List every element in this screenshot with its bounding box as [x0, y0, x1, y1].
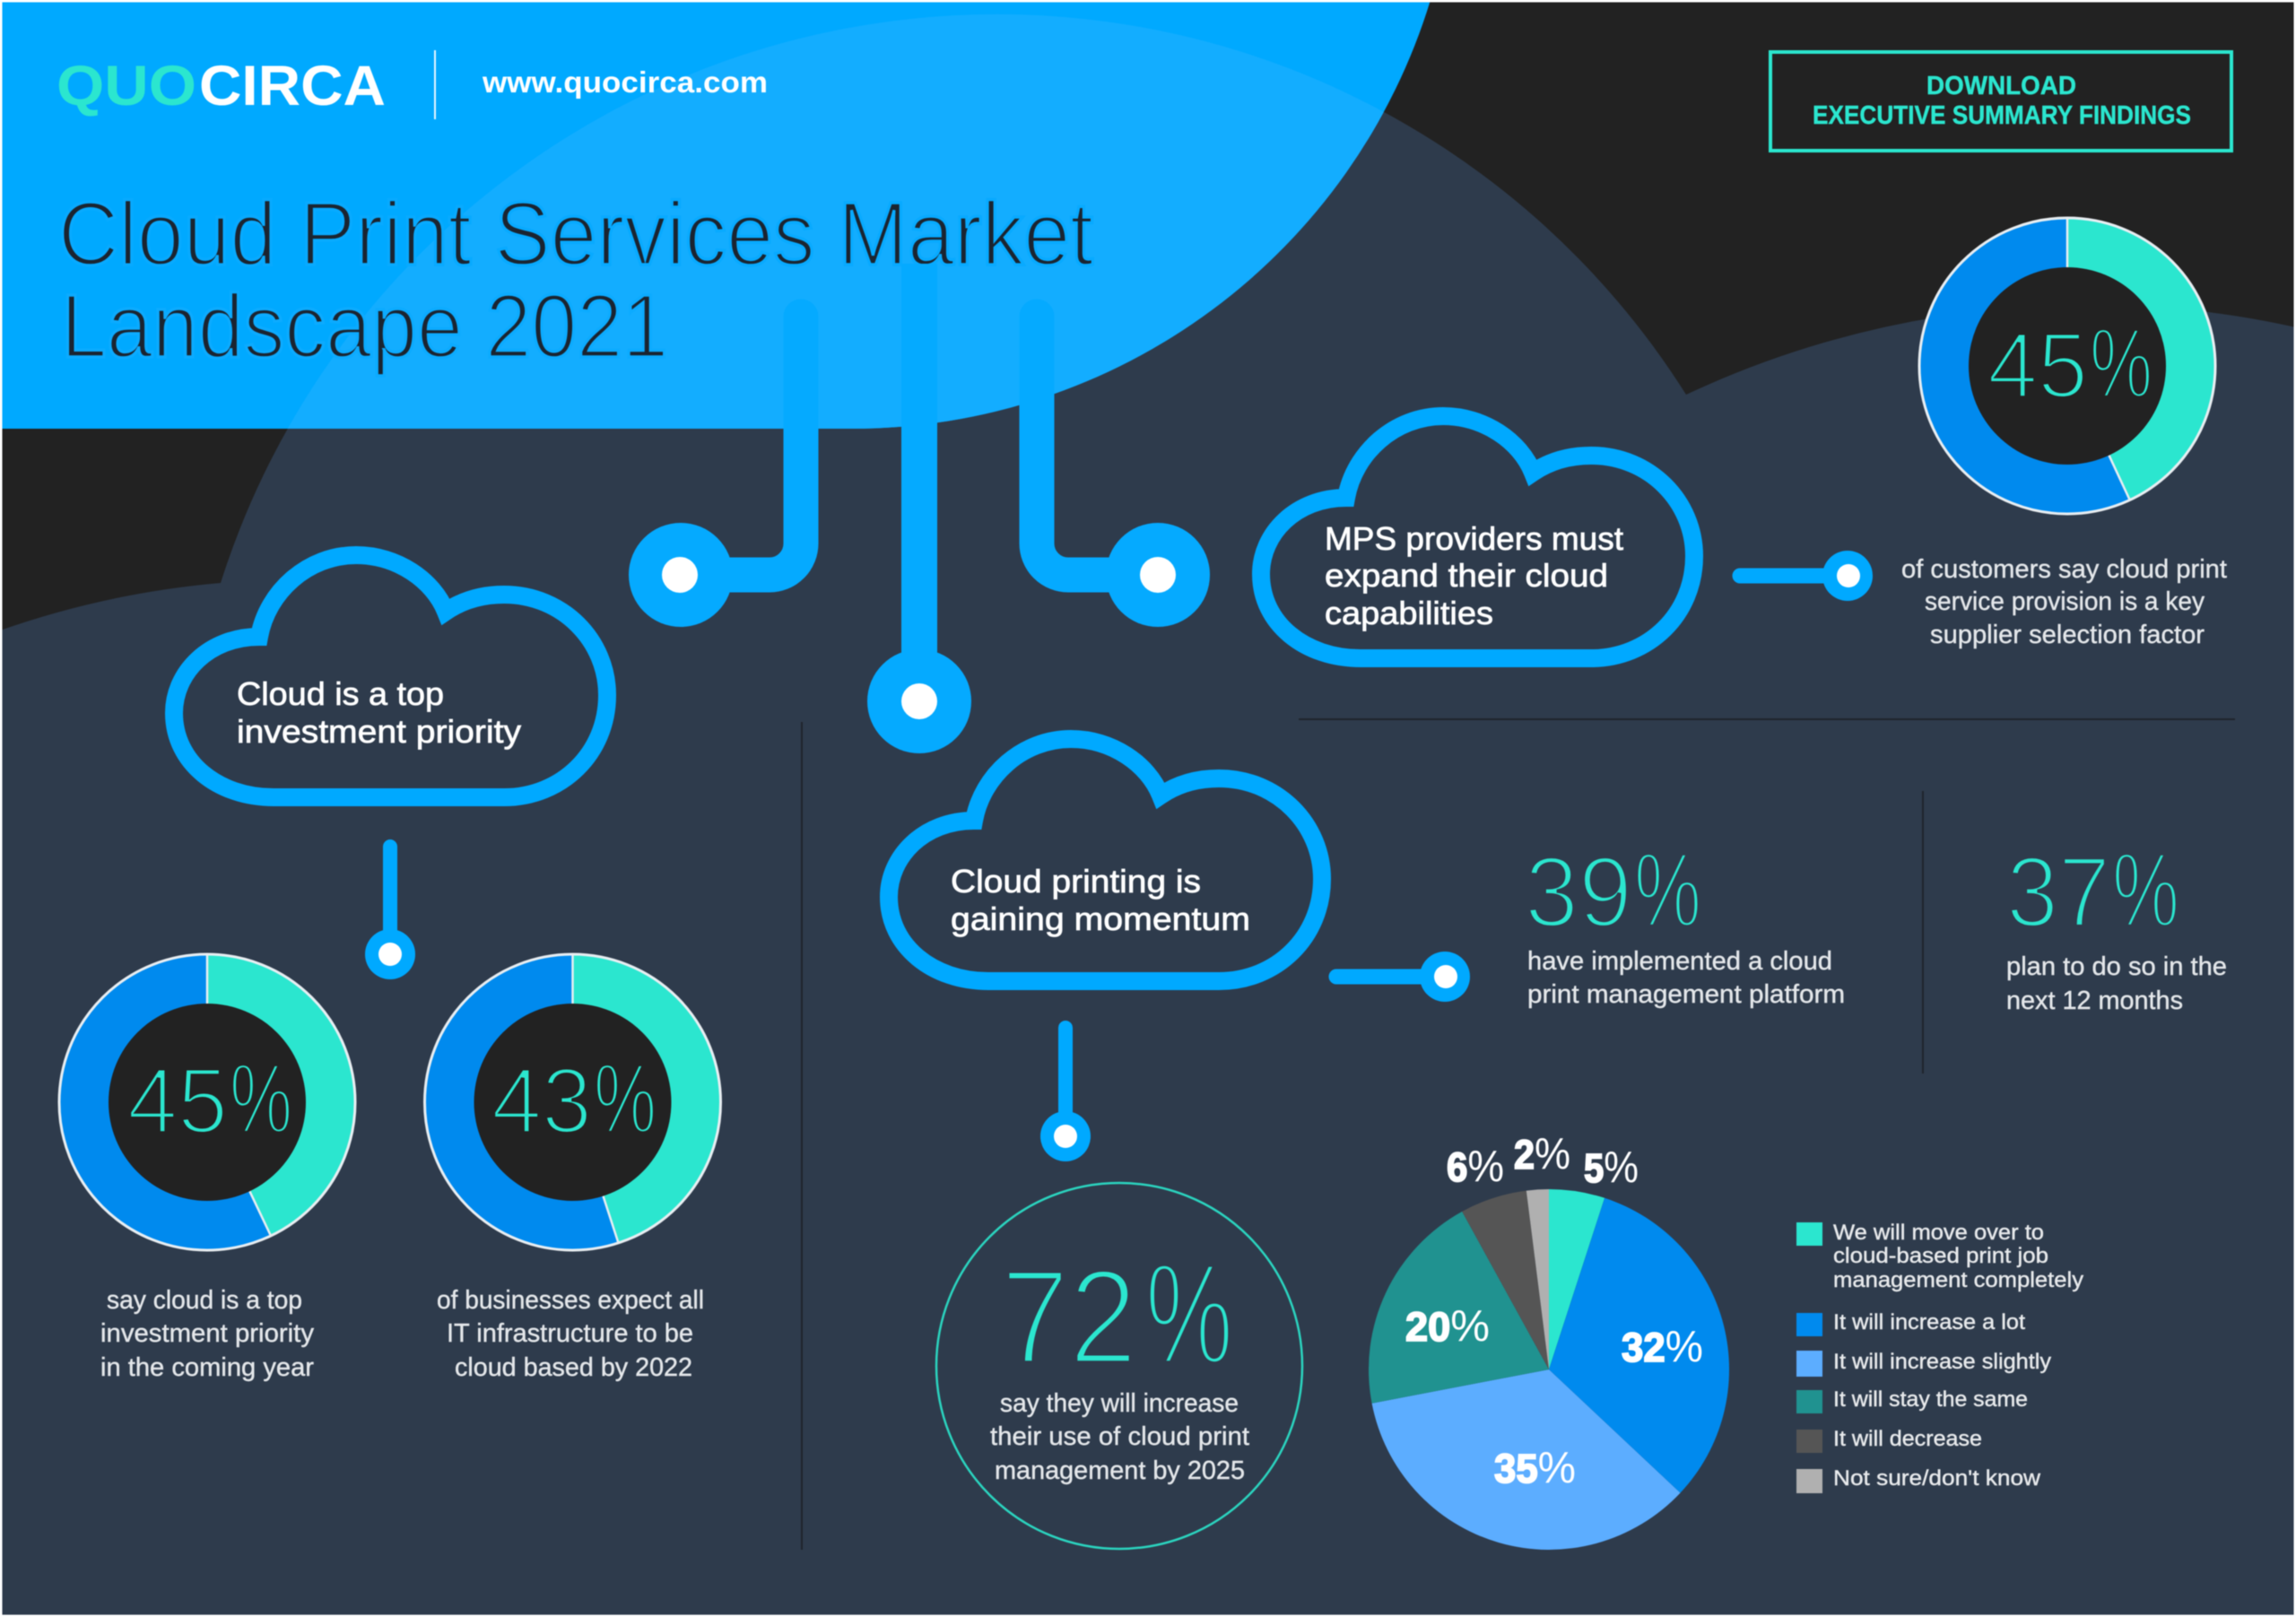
stat: 72 percent circle: their use of cloud print [990, 1422, 1249, 1451]
divider: horizontal right [1299, 718, 2235, 720]
caption: cloud infrastructure: of businesses expect all [437, 1286, 704, 1315]
donut: 43 percent cloud infrastructure: 43 [491, 1049, 592, 1153]
stat: 39 percent [1525, 831, 1845, 1009]
title: Cloud Print Services Market [58, 184, 1093, 284]
caption: supplier selection: of customers say cloud print [1901, 555, 2227, 584]
download button: DOWNLOAD [1926, 72, 2076, 100]
pie legend: management completely [1833, 1268, 2083, 1292]
stat: 39 percent: have implemented a cloud [1527, 947, 1832, 976]
title [58, 184, 1093, 377]
cloud 3: gaining momentum: gaining momentum [951, 900, 1250, 937]
connector: cloud 3 to 72 percent [1040, 1028, 1091, 1161]
stat: 37 percent: plan to do so in the [2006, 952, 2227, 981]
cloud 3: gaining momentum [889, 739, 1322, 981]
connector: cloud 1 to donuts [365, 847, 415, 979]
connector: cloud 2 to stat [1740, 551, 1873, 601]
donut: 45 percent supplier selection: % [2090, 309, 2152, 419]
caption: investment priority [100, 1286, 314, 1382]
download button [1770, 52, 2231, 151]
caption: investment priority: say cloud is a top [107, 1286, 302, 1315]
pie label: 32 percent: 32% [1622, 1323, 1703, 1371]
donut: 43 percent cloud infrastructure: % [594, 1044, 657, 1154]
caption: supplier selection: service provision is a key [1925, 587, 2205, 616]
connector: left to cloud 1 [629, 317, 801, 627]
stat: 37 percent: % [2112, 831, 2179, 950]
donut: 45 percent supplier selection [1919, 218, 2215, 514]
caption: investment priority: in the coming year [100, 1353, 314, 1382]
stat: 72 percent circle: say they will increase [1000, 1389, 1239, 1418]
cloud 2: MPS providers: expand their cloud [1325, 557, 1608, 594]
pie legend: It will decrease [1833, 1427, 1982, 1451]
download button: EXECUTIVE SUMMARY FINDINGS [1813, 101, 2191, 130]
stat: 72 percent circle: 72 [1001, 1241, 1137, 1392]
pie legend: cloud-based print job [1833, 1244, 2048, 1268]
caption: supplier selection: supplier selection factor [1930, 621, 2205, 649]
connector: cloud 3 to stats [1336, 952, 1470, 1002]
background: bright blue header shape [0, 0, 1431, 429]
pie label: 20 percent: 20% [1405, 1302, 1490, 1351]
cloud 2: MPS providers: capabilities [1325, 595, 1493, 631]
caption: cloud infrastructure: IT infrastructure to be [447, 1319, 693, 1348]
caption: investment priority: investment priority [100, 1319, 314, 1348]
cloud 2: MPS providers: MPS providers must [1325, 520, 1623, 557]
pie label: 6 percent: 6% [1447, 1143, 1504, 1191]
stat: 39 percent: 39 [1525, 837, 1632, 948]
caption: supplier selection [1901, 555, 2227, 649]
cloud 1: investment priority: Cloud is a top [237, 675, 444, 712]
donut: 45 percent investment priority [59, 954, 355, 1250]
cloud 3: gaining momentum: Cloud printing is [951, 863, 1201, 900]
stat: 37 percent: next 12 months [2006, 987, 2183, 1015]
donut: 45 percent investment priority: % [230, 1044, 292, 1154]
pie legend: We will move over to [1833, 1221, 2044, 1245]
donut: 45 percent investment priority: 45 [127, 1049, 228, 1153]
pie legend: It will increase a lot [1833, 1310, 2025, 1334]
donut: 43 percent cloud infrastructure [425, 954, 721, 1250]
caption: cloud infrastructure: cloud based by 2022 [455, 1353, 692, 1382]
caption: cloud infrastructure [437, 1286, 704, 1382]
stat: 72 percent circle [936, 1183, 1302, 1549]
connector: right to cloud 2 [1037, 317, 1210, 627]
logo: Quocirca [57, 55, 386, 117]
pie label: 5 percent: 5% [1584, 1143, 1639, 1192]
title: Landscape 2021 [61, 276, 668, 377]
cloud 1: investment priority: investment priority [237, 713, 521, 750]
stat: 39 percent: print management platform [1527, 980, 1845, 1009]
logo: Quocirca: CIRCA [199, 55, 386, 117]
stat: 37 percent [2006, 831, 2227, 1015]
pie legend: Not sure/don't know [1833, 1466, 2041, 1491]
stat: 37 percent: 37 [2006, 837, 2110, 948]
website url: www.quocirca.com [482, 65, 768, 99]
stat: 72 percent circle: % [1145, 1233, 1233, 1394]
logo: Quocirca: QUO [57, 55, 196, 117]
stat: 72 percent circle: management by 2025 [995, 1456, 1245, 1485]
pie label: 35 percent: 35% [1494, 1444, 1576, 1492]
stat: 39 percent: % [1634, 831, 1701, 950]
pie label: 2 percent: 2% [1514, 1130, 1570, 1178]
pie legend [1796, 1221, 2083, 1493]
divider: vertical left [801, 722, 803, 1550]
divider: vertical stats [1922, 791, 1924, 1074]
cloud 1: investment priority [174, 555, 607, 797]
pie chart [1369, 1130, 1729, 1550]
background: lighter overlap on header [288, 14, 1383, 429]
pie legend: It will stay the same [1833, 1387, 2028, 1412]
donut: 45 percent supplier selection: 45 [1987, 314, 2088, 418]
connector: centre to cloud 3 [867, 264, 971, 753]
pie legend: It will increase slightly [1833, 1350, 2051, 1374]
cloud 2: MPS providers [1261, 416, 1694, 658]
